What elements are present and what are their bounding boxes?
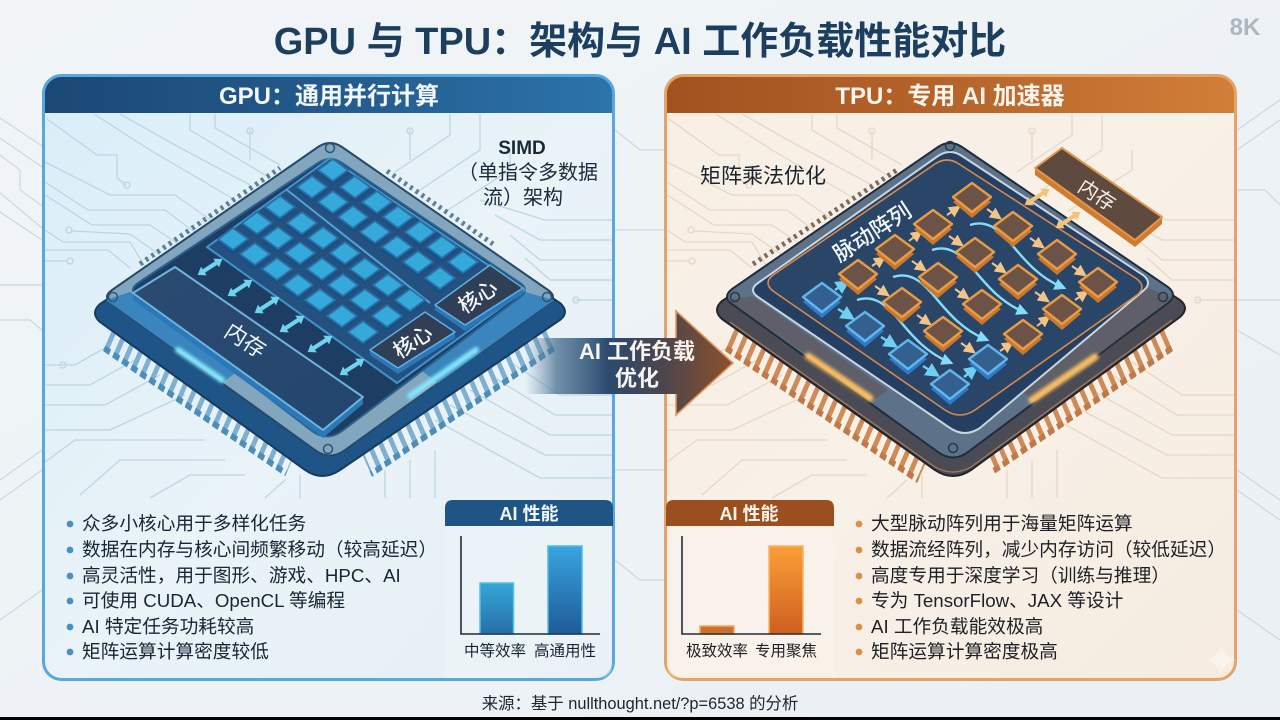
arrow label [579,339,695,391]
GPU header bar [44,76,613,113]
external memory block [1035,148,1162,247]
bar: high generality [548,546,582,634]
arrow label: 优化 [615,366,659,391]
chart title: AI 性能 [719,504,779,524]
TPU bullet list: 数据流经阵列，减少内存访问（较低延迟） [871,539,1226,560]
chart background [667,526,834,678]
chip pins [104,339,554,474]
arrow head outline [676,311,733,415]
sparkle mark [1206,645,1236,675]
glow strips [808,356,1095,400]
chip screws [108,144,552,454]
core block lower: 核心 [389,321,437,364]
TPU bullet list: 矩阵运算计算密度极高 [871,641,1058,662]
GPU bullet list: 可使用 CUDA、OpenCL 等编程 [82,590,345,611]
bar labels: 中等效率 [464,642,526,660]
SIMD label: （单指令多数据 [458,161,598,184]
TPU bullet list: 专为 TensorFlow、JAX 等设计 [871,590,1123,611]
GPU panel body [44,76,614,680]
TPU heading: TPU：专用 AI 加速器 [835,83,1065,110]
chip plate [727,143,1173,458]
GPU bullet dots [67,521,73,655]
source line: 来源：基于 nullthought.net/?p=6538 的分析 [482,695,798,713]
GPU heading: GPU：通用并行计算 [219,83,439,110]
chart header [666,500,834,526]
bar labels [686,642,817,660]
GPU bullet list: AI 特定任务功耗较高 [82,616,254,637]
GPU bullet list: 众多小核心用于多样化任务 [82,513,306,534]
TPU header bar [666,76,1235,113]
TPU panel body [666,76,1236,680]
node arrows blue [835,284,973,377]
systolic array nodes orange [839,183,1117,355]
panel: TPU [666,76,1236,680]
TPU AI performance chart [666,500,834,678]
systolic array label: 脉动阵列 [829,198,916,267]
GPU bullet list: 矩阵运算计算密度较低 [82,641,269,662]
TPU bullet dots [856,521,862,655]
TPU panel border [666,76,1236,680]
plate lower warm bands [728,288,1172,402]
chip base [95,152,565,476]
matrix multiply label: 矩阵乘法优化 [700,165,826,188]
core block lower [370,312,455,374]
core block upper [435,265,523,331]
panel: GPU [44,76,614,680]
node arrows orange [872,209,1084,351]
divider line [287,190,430,303]
bar: extreme efficiency [700,626,734,634]
memory block [133,267,363,438]
bar labels [464,642,596,660]
chip plate [107,143,553,456]
chip pins [726,339,1172,480]
data movement arrows [195,255,367,379]
bottom black strip [0,717,1280,720]
arrow label: AI 工作负载 [579,339,695,364]
inner bright border [753,152,1148,433]
core substrate [207,158,525,383]
chip top-edge pins [753,170,897,264]
chart axes [461,536,600,634]
chip base [717,154,1185,476]
core block upper: 核心 [454,276,502,319]
SIMD label [458,138,598,209]
memory arrows [1022,185,1083,232]
GPU AI performance chart [445,500,613,678]
TPU chip illustration [717,142,1185,480]
TPU bullet list: 高度专用于深度学习（训练与推理） [871,565,1170,586]
TPU bullet list: AI 工作负载能效极高 [871,616,1043,637]
inner well [133,159,525,436]
GPU bullet list: 数据在内存与核心间频繁移动（较高延迟） [82,539,437,560]
bar: medium efficiency [480,583,514,634]
chart background [445,526,612,678]
title: GPU 与 TPU：架构与 AI 工作负载性能对比 [274,21,1006,63]
chart header [445,500,613,526]
TPU bullet list: 大型脉动阵列用于海量矩阵运算 [871,513,1133,534]
TPU bullet list [871,513,1226,662]
systolic array nodes blue [803,283,1007,405]
chart axes [682,536,821,634]
base copper line [730,320,1172,472]
GPU chip illustration [95,143,565,476]
watermark 8K: 8K [1230,14,1261,41]
chip top-edge pins [140,168,493,264]
SIMD label: SIMD [498,138,546,159]
chart title: AI 性能 [499,504,559,524]
orange inset line [768,160,1142,415]
chip screws [730,142,1168,452]
bar labels: 极致效率 [686,642,748,660]
data flow waves [857,223,1062,362]
GPU panel border [44,76,614,680]
GPU bullet list [82,513,437,662]
GPU bullet list: 高灵活性，用于图形、游戏、HPC、AI [82,565,401,586]
centre arrow [525,311,733,415]
SIMD label: 流）架构 [483,186,563,209]
core tiles [217,159,479,347]
TPU circuit traces [667,114,1234,498]
glow strips [178,350,476,396]
bar labels: 高通用性 [534,642,596,660]
background circuit traces [0,100,1280,640]
arrow shape [525,311,733,415]
bar: focused specialisation [769,546,803,634]
external memory block: 内存 [1074,175,1120,216]
GPU circuit traces [45,114,612,498]
bar labels: 专用聚焦 [755,642,817,660]
plate lower blue bands [106,292,554,383]
memory block: 内存 [220,318,271,363]
